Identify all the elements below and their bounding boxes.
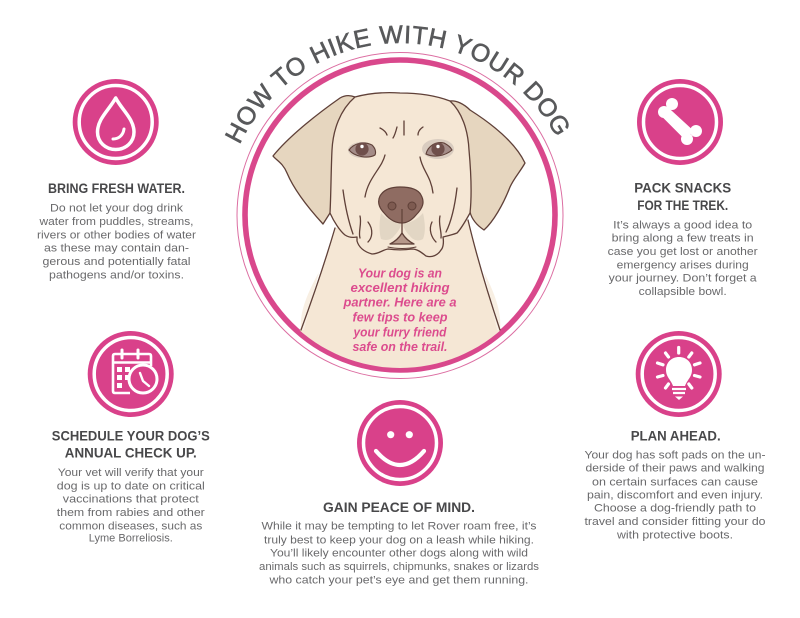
icon: smiley (357, 400, 443, 486)
body text: common diseases, such as (59, 520, 203, 532)
body text: case you get lost or another (608, 246, 758, 258)
body text: them from rabies and other (57, 507, 205, 519)
body text (584, 449, 766, 541)
heading: SCHEDULE YOUR DOG’S (52, 429, 210, 444)
heading (52, 429, 210, 460)
left ear (273, 96, 355, 224)
body text: water from puddles, streams, (38, 216, 194, 228)
body text: You’ll likely encounter other dogs along with wild (270, 548, 528, 560)
intro text: Your dog is an (358, 266, 442, 280)
body text: bring along a few treats in (612, 233, 754, 245)
body text: Your vet will verify that your (58, 467, 204, 479)
panel: bring fresh water (37, 79, 196, 281)
icon: water drop (73, 79, 159, 165)
body text: your journey. Don’t forget a (609, 273, 758, 285)
heading (634, 181, 731, 213)
nose (379, 187, 423, 223)
intro text (342, 266, 457, 354)
panel: peace of mind (259, 400, 539, 586)
body text: rivers or other bodies of water (37, 229, 196, 241)
intro text: excellent hiking (350, 281, 450, 295)
wrinkles and mouth (343, 121, 457, 248)
icon: calendar and clock (88, 331, 174, 417)
body text (259, 520, 539, 586)
panel: schedule check up (52, 331, 210, 545)
body text: travel and consider fitting your do (584, 516, 766, 528)
body text (37, 202, 196, 281)
icon: bone (637, 79, 723, 165)
left eye (348, 142, 376, 158)
body text: collapsible bowl. (639, 286, 727, 298)
heading: BRING FRESH WATER. (48, 181, 185, 196)
intro text: your furry friend (353, 326, 447, 340)
body text: pain, discomfort and even injury. (587, 489, 763, 501)
body text: It’s always a good idea to (613, 219, 752, 231)
body text: on certain surfaces can cause (592, 477, 758, 489)
illustration: dog (273, 93, 525, 380)
body text: animals such as squirrels, chipmunks, snakes or lizards (259, 561, 539, 573)
body text: vaccinations that protect (63, 494, 200, 506)
intro text: partner. Here are a (342, 296, 457, 310)
panel: plan ahead (584, 331, 766, 541)
intro text: few tips to keep (352, 311, 448, 325)
body text (57, 467, 205, 545)
body text: Your dog has soft pads on the un- (584, 449, 766, 461)
heading: GAIN PEACE OF MIND. (323, 500, 475, 515)
head (330, 93, 471, 257)
outer thin ring (237, 52, 563, 378)
icon: light bulb (636, 331, 722, 417)
panel: pack snacks (608, 79, 758, 298)
right ear (450, 101, 525, 230)
body text: While it may be tempting to let Rover roam free, it’s (262, 520, 537, 532)
body text: derside of their paws and walking (586, 463, 764, 475)
central dog badge (237, 52, 563, 380)
body text: Lyme Borreliosis. (89, 533, 173, 545)
body text: truly best to keep your dog on a leash while hiking. (264, 534, 534, 546)
body text: Do not let your dog drink (50, 202, 183, 214)
heading: PACK SNACKS (634, 181, 731, 196)
body text: emergency arises during (617, 259, 749, 271)
heading: PLAN AHEAD. (631, 429, 721, 444)
thick pink ring (245, 60, 555, 370)
body text: with protective boots. (616, 529, 733, 541)
right eye (422, 139, 454, 159)
body text: as these may contain dan- (44, 243, 189, 255)
muzzle shading (380, 213, 401, 240)
body text: pathogens and/or toxins. (49, 269, 184, 281)
heading: FOR THE TREK. (637, 198, 728, 213)
intro text: safe on the trail. (352, 340, 448, 354)
body text: Choose a dog-friendly path to (594, 503, 756, 515)
body text: who catch your pet’s eye and get them running. (268, 574, 528, 586)
body text (608, 219, 758, 298)
title: HOW TO HIKE WITH YOUR DOG (224, 25, 569, 144)
heading: ANNUAL CHECK UP. (65, 445, 197, 460)
body text: dog is up to date on critical (57, 480, 205, 492)
body text: gerous and potentially fatal (42, 256, 190, 268)
